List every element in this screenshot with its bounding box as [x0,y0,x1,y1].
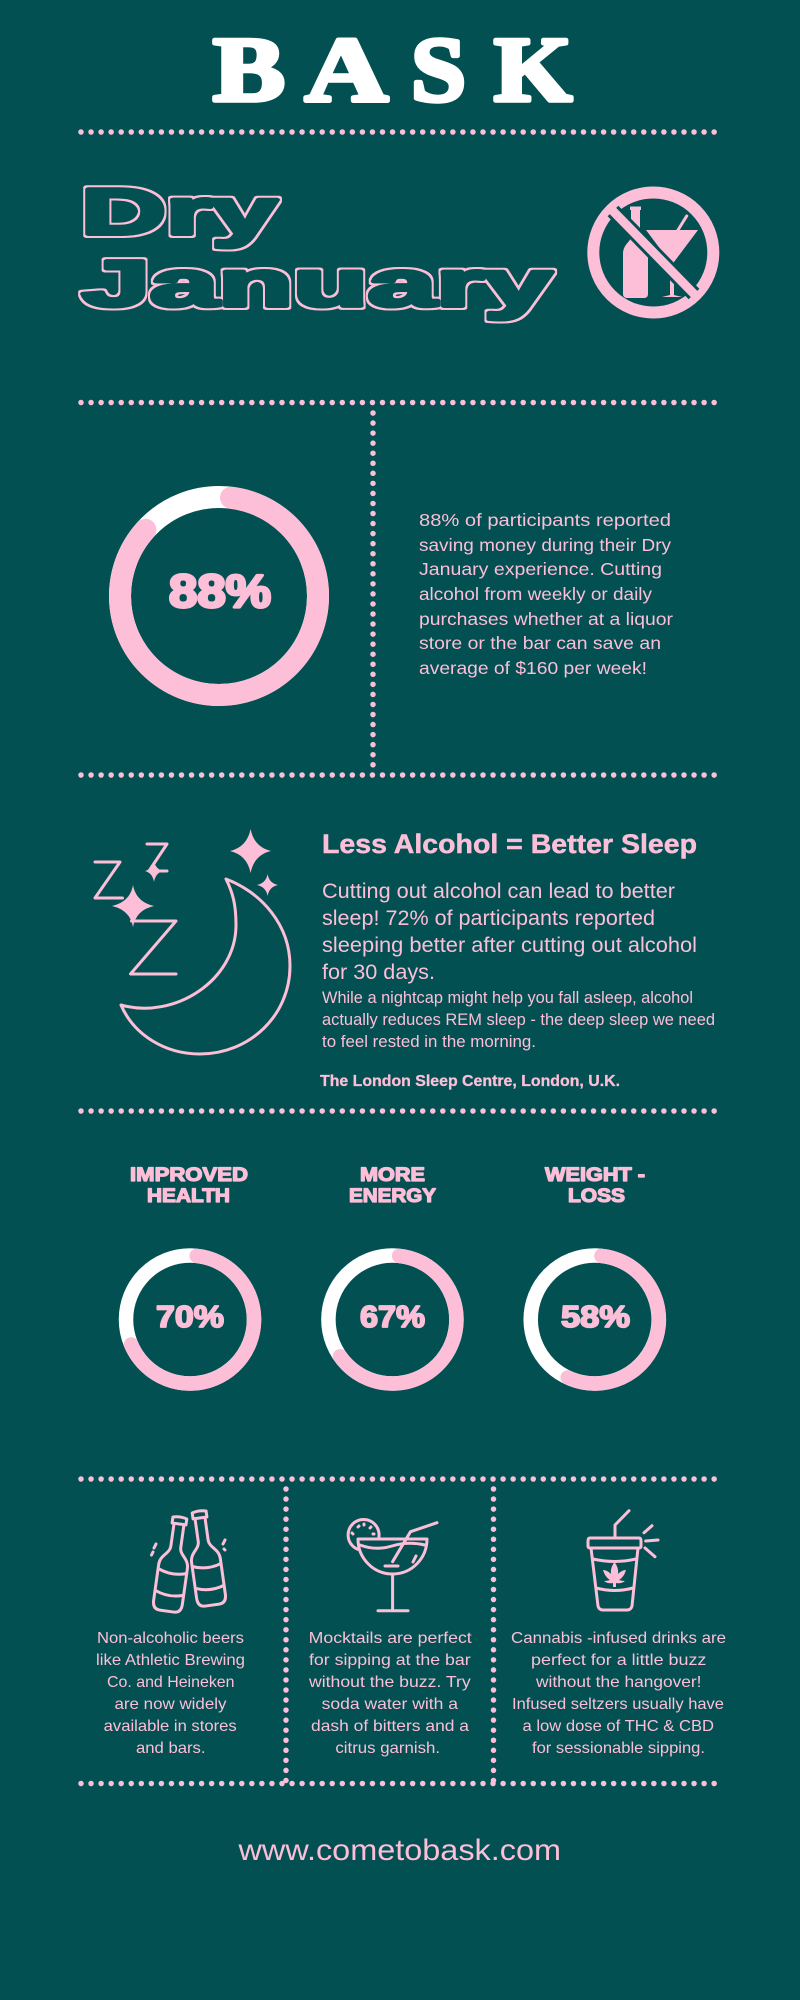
text block: non-alcoholic beers: Co. and Heineken [107,1674,234,1691]
source credit: The London Sleep Centre, London, U.K. [320,1073,620,1090]
stat: more energy: MORE [360,1164,425,1186]
text block: non-alcoholic beers: are now widely [114,1696,226,1713]
stat: improved health: IMPROVED [130,1164,248,1186]
text block: better sleep: sleeping better after cutting out alcohol [322,934,697,957]
heading: Dry January: Dry [81,175,277,248]
text block: better sleep: sleep! 72% of participants reported [322,907,655,930]
text block: saving money: 88% of participants reported [419,510,671,530]
icon: moon with stars and Zs [95,829,290,1054]
heading: Dry January [81,175,552,320]
stat: more energy: 67% [360,1299,425,1334]
text block: saving money [419,510,673,678]
text block: non-alcoholic beers [96,1630,245,1757]
title: BASK logo: B [213,18,285,120]
text block: mocktails: Mocktails are perfect [309,1630,472,1647]
text block: mocktails: citrus garnish. [335,1740,440,1757]
icon: cannabis drink cup [588,1511,658,1610]
stat: weight loss: 58% [561,1299,630,1334]
text block: saving money: store or the bar can save an [419,633,661,653]
text block: cannabis drinks: without the hangover! [535,1674,702,1691]
stat: improved health: HEALTH [147,1185,230,1207]
text block: better sleep: for 30 days. [322,961,435,984]
chart: 88% donut [120,497,318,695]
text block: saving money: average of $160 per week! [419,658,647,678]
text block: non-alcoholic beers: and bars. [136,1740,206,1757]
text block: non-alcoholic beers: Non-alcoholic beers [97,1630,244,1647]
stat: weight loss [531,1164,659,1384]
heading: Dry January: January [82,247,552,320]
stat: more energy [328,1164,456,1384]
text block: nightcap: to feel rested in the morning. [322,1033,536,1051]
text block: better sleep: Cutting out alcohol can lead to better [322,880,675,903]
icon: no alcohol sign [593,192,713,312]
text block: nightcap: actually reduces REM sleep - the deep sleep we need [322,1011,715,1029]
text block: saving money: saving money during their Dry [419,535,671,555]
stat: weight loss: WEIGHT - [545,1164,645,1186]
text block: mocktails: dash of bitters and a [311,1718,469,1735]
text block: cannabis drinks [511,1630,726,1757]
icon: mocktail glass [348,1520,437,1611]
text block: cannabis drinks: a low dose of THC & CBD [522,1718,714,1735]
stat: improved health: 70% [156,1299,224,1334]
text block: saving money: January experience. Cutting [419,559,662,579]
stat: improved health [126,1164,254,1384]
text block: nightcap [322,989,715,1051]
heading: Less Alcohol = Better Sleep: Less Alcohol = Better Sleep [322,829,697,859]
chart: 88% donut: 88% [169,565,271,617]
text block: saving money: purchases whether at a liquor [419,609,673,629]
text block: mocktails [308,1630,472,1757]
text block: cannabis drinks: perfect for a little buzz [531,1652,706,1669]
text block: cannabis drinks: Cannabis -infused drinks are [511,1630,726,1647]
text block: non-alcoholic beers: available in stores [104,1718,237,1735]
text block: nightcap: While a nightcap might help you fall asleep, alcohol [322,989,693,1007]
text block: mocktails: soda water with a [322,1696,458,1713]
text block: mocktails: without the buzz. Try [308,1674,471,1691]
text block: cannabis drinks: Infused seltzers usually have [512,1696,724,1713]
title: BASK logo [213,18,572,120]
icon: beer bottles [152,1509,227,1613]
text block: saving money: alcohol from weekly or daily [419,584,652,604]
footer url: www.cometobask.com [237,1834,561,1867]
text block: mocktails: for sipping at the bar [309,1652,471,1669]
stat: weight loss: LOSS [568,1185,625,1207]
text block: cannabis drinks: for sessionable sipping. [532,1740,705,1757]
title: BASK logo: A [305,18,388,120]
text block: better sleep [322,880,697,984]
title: BASK logo: S [411,18,466,120]
title: BASK logo: K [494,18,572,120]
stat: more energy: ENERGY [349,1185,436,1207]
text block: non-alcoholic beers: like Athletic Brewing [96,1652,245,1669]
